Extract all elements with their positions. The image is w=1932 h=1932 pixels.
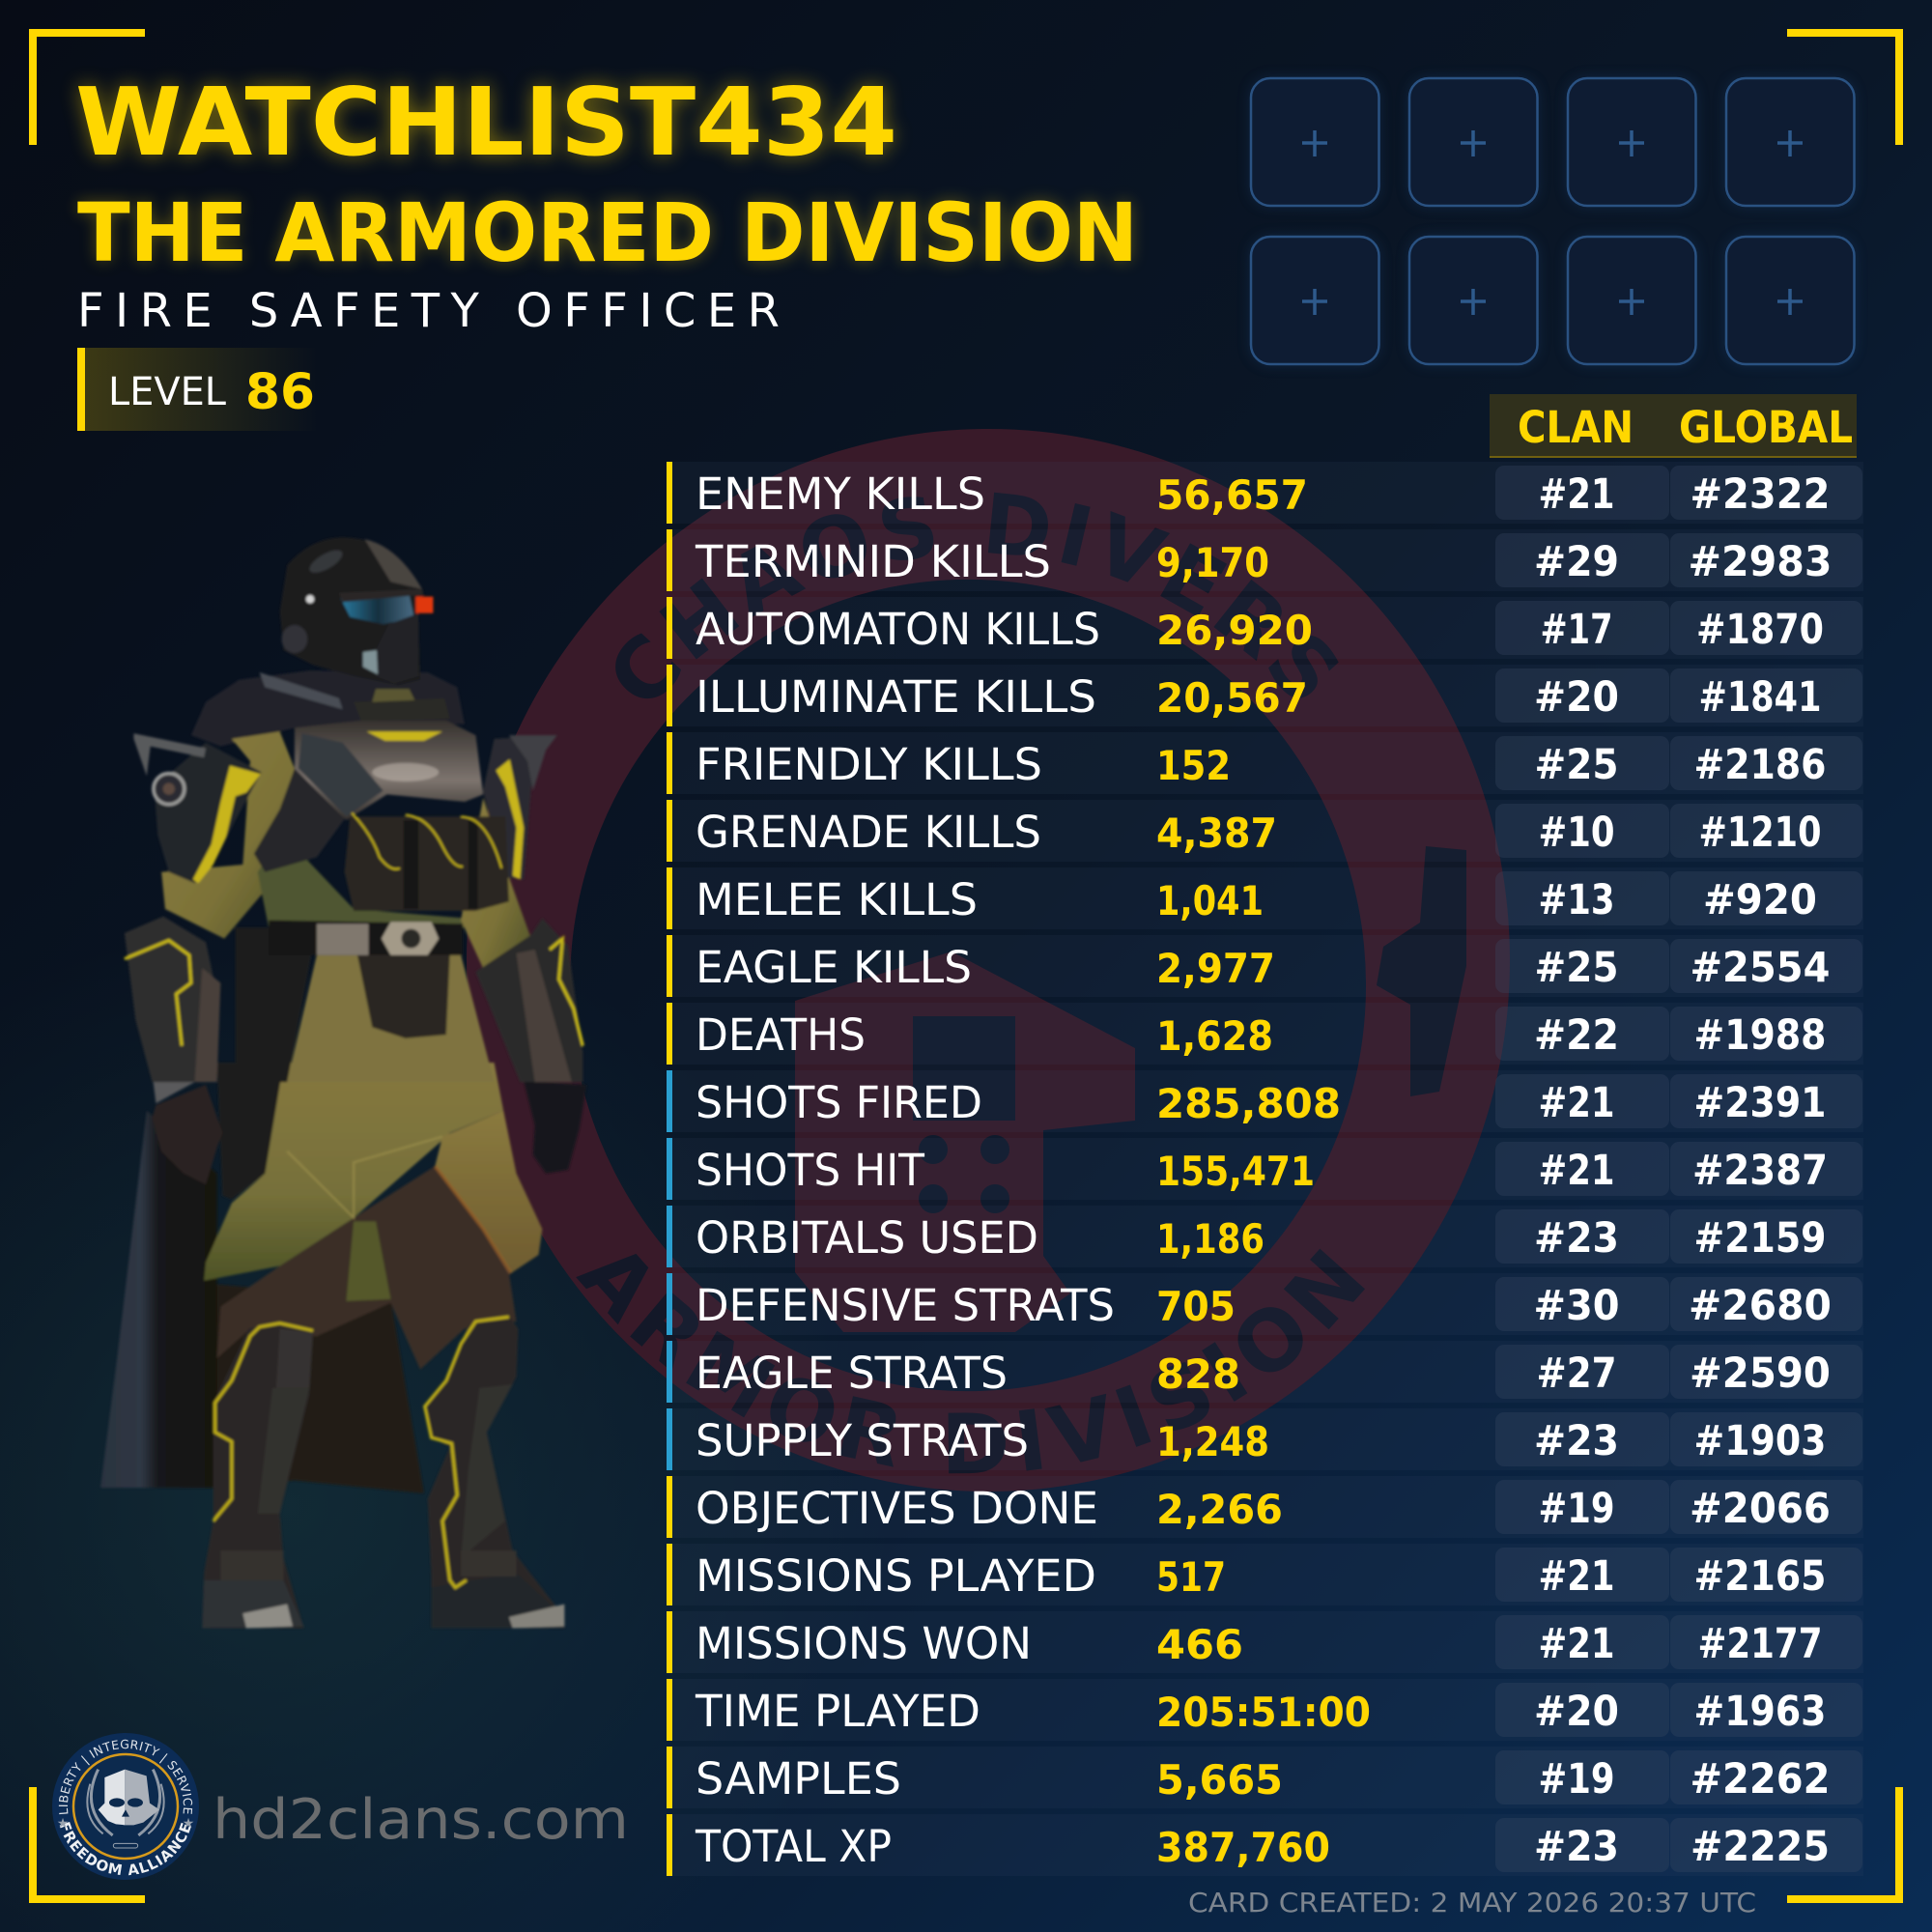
row: total xp: 387,760 bbox=[1156, 1824, 1330, 1871]
row: grenade kills: 4,387 bbox=[1156, 810, 1277, 857]
row: supply strats: #1903 bbox=[1694, 1417, 1826, 1465]
row: missions played: MISSIONS PLAYED bbox=[696, 1550, 1096, 1602]
row: shots fired: SHOTS FIRED bbox=[696, 1077, 982, 1128]
table header: clan and global bbox=[1490, 394, 1857, 458]
row: enemy kills: #2322 bbox=[1690, 470, 1830, 519]
row: grenade kills: #10 bbox=[1538, 809, 1615, 857]
table header: clan and global: GLOBAL bbox=[1679, 402, 1853, 453]
row: objectives done: 2,266 bbox=[1156, 1486, 1283, 1533]
row: deaths: 1,628 bbox=[1156, 1012, 1273, 1060]
row: eagle strats bbox=[667, 1341, 1863, 1403]
row: eagle strats: #2590 bbox=[1690, 1350, 1831, 1398]
row: deaths: #22 bbox=[1534, 1011, 1619, 1060]
row: eagle strats: #27 bbox=[1536, 1350, 1617, 1398]
row: objectives done: OBJECTIVES DONE bbox=[696, 1483, 1098, 1534]
row: orbitals used: #2159 bbox=[1694, 1214, 1826, 1263]
row: orbitals used: ORBITALS USED bbox=[696, 1212, 1038, 1264]
row: eagle kills: 2,977 bbox=[1156, 945, 1275, 992]
row: missions played: #2165 bbox=[1694, 1552, 1826, 1601]
row: missions played: 517 bbox=[1156, 1553, 1226, 1601]
row: shots hit: #2387 bbox=[1692, 1147, 1828, 1195]
row: shots hit bbox=[667, 1138, 1863, 1200]
row: deaths bbox=[667, 1003, 1863, 1065]
panel: stats table bbox=[667, 462, 1863, 1876]
row: missions won: #2177 bbox=[1698, 1620, 1822, 1668]
row: defensive strats: #30 bbox=[1534, 1282, 1619, 1330]
row: missions played bbox=[667, 1544, 1863, 1605]
character: armored helldiver bbox=[100, 537, 586, 1629]
title: player name: WATCHLIST434 bbox=[75, 68, 897, 177]
row: eagle strats: 828 bbox=[1156, 1350, 1240, 1398]
row: grenade kills: #1210 bbox=[1698, 809, 1822, 857]
panel: medal slots bbox=[1251, 78, 1855, 364]
row: shots hit: #21 bbox=[1538, 1147, 1615, 1195]
footer: card created date: CARD CREATED: 2 MAY 2026 20:37 UTC bbox=[1188, 1888, 1756, 1918]
logo: freedom alliance badge: LIBERTY | INTEGRITY | SERVICE bbox=[58, 1739, 193, 1814]
row: eagle kills: #25 bbox=[1534, 944, 1619, 992]
row: shots fired: 285,808 bbox=[1156, 1080, 1341, 1127]
row: samples: #19 bbox=[1538, 1755, 1615, 1804]
row: terminid kills bbox=[667, 529, 1863, 591]
row: illuminate kills: 20,567 bbox=[1156, 674, 1308, 722]
corner bracket: top left bbox=[33, 33, 145, 145]
row: orbitals used bbox=[667, 1206, 1863, 1267]
row: samples: 5,665 bbox=[1156, 1756, 1283, 1804]
watermark emblem: clan crest: CHAOS DIVERS bbox=[615, 493, 1339, 699]
row: melee kills: #13 bbox=[1538, 876, 1615, 924]
row: illuminate kills: #1841 bbox=[1698, 673, 1822, 722]
row: orbitals used: 1,186 bbox=[1156, 1215, 1264, 1263]
row: time played: #1963 bbox=[1694, 1688, 1826, 1736]
row: friendly kills: FRIENDLY KILLS bbox=[696, 739, 1042, 790]
row: shots fired bbox=[667, 1070, 1863, 1132]
row: time played: TIME PLAYED bbox=[695, 1686, 980, 1737]
row: missions won bbox=[667, 1611, 1863, 1673]
row: eagle kills: EAGLE KILLS bbox=[696, 942, 972, 993]
character lower body bbox=[100, 1063, 586, 1629]
row: grenade kills bbox=[667, 800, 1863, 862]
row: enemy kills: ENEMY KILLS bbox=[696, 469, 985, 520]
row: eagle kills bbox=[667, 935, 1863, 997]
row: enemy kills bbox=[667, 462, 1863, 524]
row: friendly kills: #25 bbox=[1534, 741, 1619, 789]
row: supply strats: SUPPLY STRATS bbox=[696, 1415, 1029, 1466]
row: objectives done bbox=[667, 1476, 1863, 1538]
row: supply strats: #23 bbox=[1534, 1417, 1619, 1465]
row: deaths: #1988 bbox=[1694, 1011, 1826, 1060]
row: automaton kills: #1870 bbox=[1696, 606, 1824, 654]
watermark emblem: clan crest bbox=[467, 429, 1510, 1492]
row: objectives done: #2066 bbox=[1690, 1485, 1831, 1533]
row: defensive strats: #2680 bbox=[1689, 1282, 1832, 1330]
row: automaton kills: 26,920 bbox=[1156, 607, 1313, 654]
row: illuminate kills bbox=[667, 665, 1863, 726]
row: terminid kills: 9,170 bbox=[1156, 539, 1269, 586]
logo: freedom alliance badge: FREEDOM ALLIANCE bbox=[60, 1822, 191, 1876]
logo text: website: hd2clans.com bbox=[213, 1788, 629, 1852]
row: friendly kills: #2186 bbox=[1694, 741, 1826, 789]
table header: clan and global: CLAN bbox=[1518, 402, 1634, 453]
row: illuminate kills: ILLUMINATE KILLS bbox=[696, 671, 1096, 723]
logo: freedom alliance badge: ★ bbox=[183, 1816, 194, 1832]
level badge bbox=[77, 348, 319, 431]
row: friendly kills bbox=[667, 732, 1863, 794]
row: objectives done: #19 bbox=[1538, 1485, 1615, 1533]
row: automaton kills bbox=[667, 597, 1863, 659]
row: terminid kills: TERMINID KILLS bbox=[695, 536, 1051, 587]
row: missions won: 466 bbox=[1156, 1621, 1243, 1668]
row: terminid kills: #2983 bbox=[1689, 538, 1832, 586]
level badge: 86 bbox=[245, 364, 315, 421]
level badge: LEVEL bbox=[108, 370, 227, 414]
row: missions won: #21 bbox=[1538, 1620, 1615, 1668]
row: missions played: #21 bbox=[1538, 1552, 1615, 1601]
row: total xp: #23 bbox=[1534, 1823, 1619, 1871]
logo: freedom alliance badge bbox=[52, 1733, 199, 1880]
character upper body bbox=[125, 537, 582, 1082]
row: defensive strats: DEFENSIVE STRATS bbox=[696, 1280, 1115, 1331]
row: melee kills: MELEE KILLS bbox=[696, 874, 978, 925]
row: shots hit: 155,471 bbox=[1156, 1148, 1315, 1195]
row: enemy kills: #21 bbox=[1538, 470, 1615, 519]
row: terminid kills: #29 bbox=[1534, 538, 1619, 586]
row: eagle strats: EAGLE STRATS bbox=[696, 1348, 1008, 1399]
row: melee kills: 1,041 bbox=[1156, 877, 1264, 924]
row: illuminate kills: #20 bbox=[1534, 673, 1619, 722]
row: time played: 205:51:00 bbox=[1156, 1689, 1371, 1736]
row: shots fired: #21 bbox=[1538, 1079, 1615, 1127]
row: time played bbox=[667, 1679, 1863, 1741]
row: deaths: DEATHS bbox=[696, 1009, 866, 1061]
row: samples bbox=[667, 1747, 1863, 1808]
subheading: player title: FIRE SAFETY OFFICER bbox=[77, 284, 780, 338]
heading: clan name: THE ARMORED DIVISION bbox=[77, 185, 1138, 280]
row: total xp: TOTAL XP bbox=[695, 1821, 892, 1872]
row: melee kills: #920 bbox=[1703, 876, 1817, 924]
row: friendly kills: 152 bbox=[1156, 742, 1231, 789]
row: total xp bbox=[667, 1814, 1863, 1876]
row: time played: #20 bbox=[1534, 1688, 1619, 1736]
logo: freedom alliance badge: ★ bbox=[57, 1816, 69, 1832]
row: supply strats bbox=[667, 1408, 1863, 1470]
watermark emblem: clan crest: ARMOR DIVISION bbox=[576, 1248, 1365, 1474]
row: defensive strats: 705 bbox=[1156, 1283, 1236, 1330]
row: automaton kills: AUTOMATON KILLS bbox=[696, 604, 1100, 655]
corner bracket: bottom right bbox=[1787, 1787, 1899, 1899]
row: automaton kills: #17 bbox=[1540, 606, 1613, 654]
corner bracket: bottom left bbox=[33, 1787, 145, 1899]
row: samples: SAMPLES bbox=[696, 1753, 901, 1804]
row: melee kills bbox=[667, 867, 1863, 929]
row: missions won: MISSIONS WON bbox=[696, 1618, 1032, 1669]
row: supply strats: 1,248 bbox=[1156, 1418, 1269, 1465]
corner bracket: top right bbox=[1787, 33, 1899, 145]
row: total xp: #2225 bbox=[1690, 1823, 1830, 1871]
row: defensive strats bbox=[667, 1273, 1863, 1335]
row: enemy kills: 56,657 bbox=[1156, 471, 1308, 519]
row: grenade kills: GRENADE KILLS bbox=[696, 807, 1041, 858]
row: samples: #2262 bbox=[1690, 1755, 1830, 1804]
row: shots hit: SHOTS HIT bbox=[696, 1145, 924, 1196]
row: shots fired: #2391 bbox=[1694, 1079, 1826, 1127]
row: orbitals used: #23 bbox=[1534, 1214, 1619, 1263]
row: eagle kills: #2554 bbox=[1690, 944, 1830, 992]
